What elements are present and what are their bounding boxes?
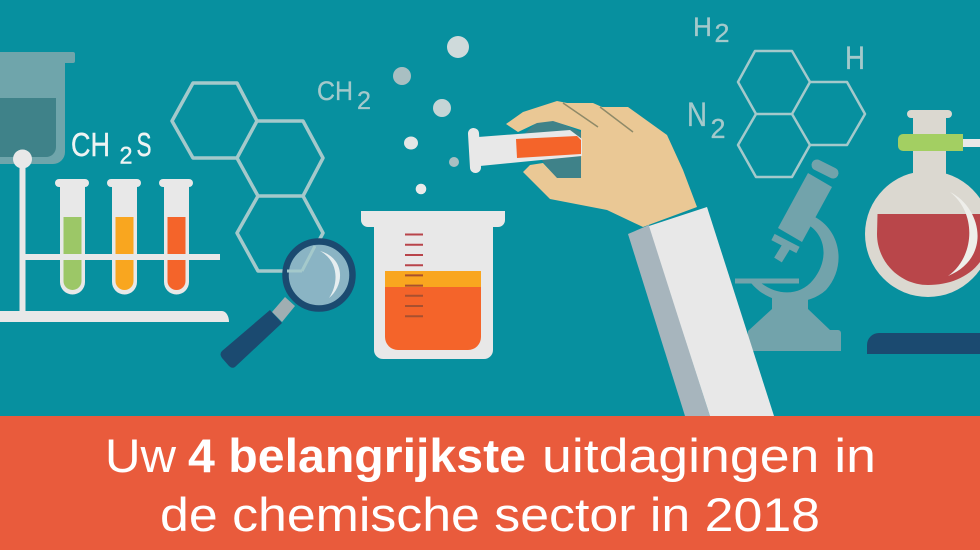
hand: [506, 101, 697, 227]
icon: measuring beaker: [361, 211, 505, 359]
title banner: [0, 416, 980, 550]
finger lines: [563, 103, 633, 132]
title line 1: [105, 429, 876, 482]
label: CH2S formula: S: [136, 126, 152, 163]
icon: dark blue stand: [867, 333, 980, 354]
shade between fingers: [522, 120, 581, 179]
label: CH2 formula: 2: [357, 87, 371, 115]
label: H2 formula: 2: [714, 18, 730, 48]
label: N2 formula: 2: [710, 113, 726, 144]
label: CH2S formula: CH: [71, 126, 110, 163]
green test tube: [55, 179, 89, 294]
red test tube: [159, 179, 193, 294]
title line 2: de chemische sector in 2018: [160, 488, 820, 541]
red liquid: [877, 214, 980, 285]
icon: hexagon molecule right: [738, 51, 865, 177]
icon: faded beaker top left: [0, 52, 75, 164]
icon: lab coat sleeve: [628, 207, 774, 416]
label: CH2S formula: 2: [120, 142, 132, 170]
measuring ticks: [405, 234, 423, 316]
icon: hexagon molecule left: [172, 83, 323, 271]
background panel: [0, 0, 980, 416]
label: CH2 formula: [317, 76, 371, 115]
title line 1: uitdagingen in: [542, 429, 876, 482]
icon: test tube rack: [0, 150, 229, 322]
icon: magnifying glass: [220, 242, 352, 368]
label: CH2S formula: [71, 126, 152, 170]
label: N2 formula: [687, 96, 726, 144]
label: H formula: H: [845, 40, 865, 76]
label: H2 formula: [693, 12, 730, 48]
green stopper clamp: [898, 134, 963, 151]
icon: bubbles: [393, 36, 469, 194]
liquid: [385, 271, 481, 350]
test tube in hand: [468, 128, 582, 173]
label: H2 formula: H: [693, 12, 712, 42]
icon: microscope: [735, 165, 841, 351]
icon: round bottom flask: [865, 110, 980, 297]
label: N2 formula: N: [687, 96, 707, 134]
label: CH2 formula: CH: [317, 76, 353, 106]
icon: hand holding test tube: [468, 101, 697, 227]
title line 1: 4 belangrijkste: [188, 429, 526, 482]
title line 1: Uw: [105, 429, 177, 482]
orange test tube: [107, 179, 141, 294]
